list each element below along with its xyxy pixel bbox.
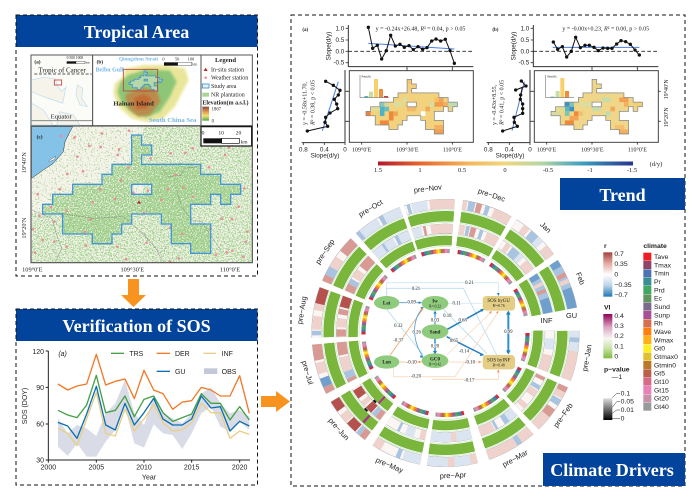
month labels: pre−Aug bbox=[295, 296, 308, 325]
map a: location in Asia: km bbox=[86, 61, 90, 65]
month labels: pre−Jul bbox=[300, 360, 315, 386]
heading: Tropical Area bbox=[16, 15, 258, 47]
month labels: pre−Dec bbox=[477, 186, 507, 204]
top scatter a: 0.5 bbox=[336, 37, 345, 44]
left scatter b: y = -0.43x+8.55, bbox=[492, 84, 498, 125]
map b: Hainan Island: Qiongzhou Strait bbox=[119, 56, 158, 62]
legend: climate: Gt0 bbox=[654, 346, 665, 353]
legend: climate: Gtmax0 bbox=[654, 354, 678, 361]
edge coefficients: 0.20 bbox=[431, 344, 440, 349]
top scatter b: 1.0 bbox=[521, 25, 530, 32]
legend: r: 0 bbox=[614, 271, 618, 278]
legend: p-value: —1 bbox=[612, 374, 622, 381]
map a: location in Asia: Tropic of Cancer bbox=[38, 67, 86, 75]
legend: r: r bbox=[604, 243, 607, 250]
arrow: verification to drivers bbox=[261, 391, 290, 412]
heading: Climate Drivers bbox=[543, 453, 685, 486]
trend charts b bbox=[484, 25, 670, 160]
inset histogram b bbox=[546, 75, 574, 98]
legend: climate: Gt15 bbox=[654, 387, 669, 394]
sector: Feb bbox=[267, 155, 624, 502]
left scatter a: 0 bbox=[343, 146, 347, 153]
map axis labels: 19°20′N bbox=[21, 217, 28, 239]
map b: Hainan Island: Hainan Island bbox=[113, 100, 154, 107]
month labels: pre−Nov bbox=[413, 182, 443, 195]
inset map group bbox=[31, 55, 252, 126]
chart legend: INF bbox=[222, 351, 233, 358]
sector: pre-Mar bbox=[264, 151, 627, 502]
map b: Hainan Island: Beibu Gulf bbox=[96, 68, 125, 74]
top scatter a: -0.5 bbox=[333, 60, 345, 67]
trend charts b: (b) bbox=[492, 28, 499, 33]
edge coefficients bbox=[393, 281, 513, 383]
inset histogram a bbox=[360, 75, 389, 98]
top scatter b: -0.5 bbox=[518, 60, 530, 67]
heat map b: 19°20′N bbox=[663, 107, 670, 127]
heat map b: 109°0′E bbox=[537, 146, 557, 153]
heat map a: 109°0′E bbox=[352, 146, 372, 153]
legend: climate: Pr bbox=[654, 279, 662, 286]
legend: VI: 0 bbox=[614, 354, 618, 361]
edge coefficients: 0.03 bbox=[431, 318, 440, 323]
legend: p-value: 0.1 bbox=[621, 390, 630, 397]
heat map a bbox=[347, 68, 473, 153]
month labels: GU bbox=[566, 311, 577, 320]
map axis labels: 110°0′E bbox=[220, 266, 240, 273]
line chart: SOS by year: 30 bbox=[36, 458, 44, 465]
colour bar: slope d/y: (d/y) bbox=[650, 161, 662, 168]
left scatter a: Slope(d/y) bbox=[311, 153, 339, 160]
month labels: INF bbox=[541, 316, 553, 325]
map a: location in Asia: 0 500 1000 bbox=[67, 56, 83, 60]
legend: climate: Tmin bbox=[654, 271, 669, 278]
weather stations bbox=[31, 129, 249, 263]
legend: r: −0.35 bbox=[614, 282, 632, 289]
edge coefficients: 0.11 bbox=[453, 302, 461, 307]
line chart: SOS by year: 2000 bbox=[41, 464, 56, 471]
chart legend: TRS bbox=[129, 351, 144, 358]
node: SOS by INF: SOS byINF bbox=[487, 358, 511, 363]
map legend: 0 bbox=[212, 120, 215, 125]
map b: Hainan Island bbox=[93, 55, 201, 126]
legend: climate: Rh bbox=[654, 321, 663, 328]
chart legend: GU bbox=[175, 369, 185, 376]
map scale bar: 0 bbox=[202, 130, 205, 136]
panel: verification of SOS bbox=[16, 309, 258, 485]
trend charts a bbox=[299, 25, 473, 160]
left scatter b bbox=[484, 70, 532, 160]
legend: VI: 0.4 bbox=[614, 313, 624, 320]
node: Lon: Lon bbox=[382, 361, 391, 366]
sector: pre-Jan bbox=[314, 202, 577, 464]
top scatter b: y = -0.00x+0.23, R² = 0.00, p > 0.05 bbox=[562, 27, 649, 33]
legend: p-value: 0.05 bbox=[621, 399, 634, 406]
map b: Hainan Island: (b) bbox=[97, 58, 103, 65]
legend: climate: Prd bbox=[654, 287, 665, 294]
panel: trend and climate drivers bbox=[263, 15, 685, 502]
line chart: SOS by year: 2010 bbox=[136, 464, 152, 471]
top scatter b: 0.0 bbox=[521, 48, 530, 55]
month labels: Jan bbox=[538, 220, 553, 235]
node: Iw bbox=[422, 296, 448, 311]
colour bar: slope d/y: 0.5 bbox=[458, 167, 466, 174]
legend: climate: Tmax bbox=[654, 262, 672, 269]
diagram edges bbox=[387, 283, 508, 379]
colour bar: slope d/y: -1 bbox=[587, 167, 593, 174]
line chart: SOS by year: 60 bbox=[36, 422, 44, 429]
month labels: pre−Oct bbox=[357, 198, 384, 219]
edge coefficients: 0.09 bbox=[407, 301, 416, 306]
map legend: In-situ station bbox=[211, 67, 244, 73]
node: Lat bbox=[374, 296, 399, 309]
map axis labels: 19°40′N bbox=[21, 152, 28, 173]
node: SOS by INF: R²=0.48 bbox=[493, 363, 505, 367]
legend: climate: Gtmin0 bbox=[654, 362, 676, 369]
edge coefficients: -0.17 bbox=[464, 378, 475, 383]
map legend bbox=[201, 55, 252, 126]
heat map b: 110°0′E bbox=[628, 146, 647, 153]
node: Lon bbox=[374, 355, 399, 369]
legend: p-value bbox=[603, 366, 634, 422]
node: Iw: R²=0.22 bbox=[429, 304, 441, 308]
study area outline bbox=[43, 135, 241, 253]
line chart: SOS by year: 2005 bbox=[89, 464, 104, 471]
legend: climate: Gt10 bbox=[654, 379, 669, 386]
sector: pre-Dec bbox=[301, 188, 590, 478]
edge coefficients: 0.21 bbox=[412, 287, 421, 292]
sector: pre-Apr bbox=[289, 177, 602, 489]
month labels bbox=[295, 182, 594, 480]
map legend: Study area bbox=[211, 84, 237, 90]
top scatter a: 0.0 bbox=[336, 48, 345, 55]
line chart: SOS by year: 2015 bbox=[184, 464, 200, 471]
month labels: pre−Apr bbox=[439, 470, 467, 480]
map a: location in Asia: (a) bbox=[34, 58, 41, 65]
left scatter a: y = -0.58x+11.70, bbox=[303, 82, 309, 125]
left scatter a: R² = 0.38, p < 0.05 bbox=[310, 80, 316, 126]
left scatter b: 0.8 bbox=[484, 146, 493, 153]
map legend: 1867 bbox=[212, 107, 222, 112]
legend: climate: Gt5 bbox=[654, 371, 665, 378]
heat map a: 109°30′E bbox=[396, 146, 419, 153]
legend: VI: VI bbox=[604, 304, 611, 311]
node: GC0: GC0 bbox=[430, 357, 440, 362]
map a: location in Asia bbox=[31, 55, 93, 126]
sector: pre-Feb bbox=[275, 163, 616, 502]
top scatter b bbox=[510, 25, 658, 69]
heading: Climate Drivers: Climate Drivers bbox=[550, 460, 674, 480]
arrow heads bbox=[419, 293, 511, 372]
node: SOS by INF bbox=[483, 355, 515, 369]
heat map b bbox=[532, 68, 670, 153]
edge coefficients: 0.18 bbox=[443, 314, 452, 319]
top scatter a: 1.0 bbox=[336, 25, 345, 32]
sector: pre-Nov bbox=[283, 170, 608, 496]
node: GC0 bbox=[422, 353, 448, 368]
map legend: Legend bbox=[215, 57, 236, 64]
node: SOS by GU bbox=[483, 296, 515, 311]
line chart: SOS by year bbox=[22, 349, 250, 481]
map c: study area with rubber plantations bbox=[21, 126, 252, 273]
node: GC0: R²=0.42 bbox=[429, 362, 441, 366]
in-situ station marker bbox=[137, 200, 141, 204]
edge coefficients: -0.14 bbox=[459, 349, 470, 354]
map axis labels bbox=[21, 152, 240, 273]
heat map a: Ratio(%) bbox=[362, 76, 371, 79]
node: Sand: Sand bbox=[430, 330, 441, 335]
legend: climate: Wmax bbox=[654, 337, 674, 344]
map b: Hainan Island: 50 bbox=[175, 56, 179, 61]
OBS band bbox=[58, 380, 249, 457]
colour bar: slope d/y bbox=[374, 161, 662, 174]
edge coefficients: 0.68 bbox=[458, 318, 467, 323]
legend: r bbox=[603, 243, 632, 299]
map b: Hainan Island: South China Sea bbox=[149, 117, 197, 124]
line chart: SOS by year: 120 bbox=[32, 349, 44, 356]
sector: pre-Oct bbox=[263, 151, 628, 502]
heading: Tropical Area: Tropical Area bbox=[84, 22, 189, 42]
top scatter b: 0.5 bbox=[521, 37, 530, 44]
left scatter b: 0.4 bbox=[505, 146, 514, 153]
map legend: NR plantation bbox=[211, 93, 245, 99]
map a: location in Asia: Equator bbox=[51, 114, 73, 121]
edge coefficients: -0.10 bbox=[407, 361, 417, 366]
month labels: pre−Jan bbox=[580, 344, 594, 372]
top scatter a: Slope(d/y) bbox=[325, 32, 332, 60]
legend: VI: 0.2 bbox=[614, 333, 624, 340]
map c: study area with rubber plantations: (c) bbox=[37, 134, 43, 141]
line chart: SOS by year: 90 bbox=[36, 385, 44, 392]
legend: r: −0.7 bbox=[614, 292, 628, 299]
series lines bbox=[58, 354, 249, 446]
month labels: pre−Mar bbox=[501, 448, 530, 469]
sector: pre-Jun bbox=[265, 152, 626, 502]
month labels: pre−Feb bbox=[551, 401, 575, 429]
legend: climate: Wave bbox=[654, 329, 671, 336]
line chart: SOS by year: 2020 bbox=[232, 464, 248, 471]
sector: pre-May bbox=[294, 182, 597, 484]
chart legend bbox=[111, 351, 237, 376]
top scatter a bbox=[325, 25, 473, 69]
legend: r: 0.7 bbox=[614, 251, 624, 258]
heat map b: Ratio(%) bbox=[547, 76, 557, 79]
edge coefficients: -0.20 bbox=[411, 374, 422, 379]
sector: Jan bbox=[268, 155, 623, 502]
edge coefficients: 0.21 bbox=[465, 281, 474, 286]
node: Iw: Iw bbox=[432, 299, 438, 304]
legend: p-value: 0.01 bbox=[621, 407, 634, 414]
legend: climate bbox=[643, 243, 678, 411]
map axis labels: 109°0′E bbox=[22, 266, 43, 273]
left scatter b: R² = 0.41, p < 0.05 bbox=[500, 80, 506, 126]
left scatter a: 0.8 bbox=[299, 146, 308, 153]
heading: Trend bbox=[560, 178, 685, 210]
chart legends bbox=[603, 243, 678, 422]
trend charts a: (a) bbox=[302, 28, 308, 33]
path diagram bbox=[374, 281, 515, 383]
node: SOS by GU: SOS byGU bbox=[487, 299, 510, 304]
colour bar: slope d/y: -1.5 bbox=[627, 167, 637, 174]
map b: Hainan Island: 100 bbox=[188, 56, 194, 61]
chart legend: DER bbox=[175, 351, 190, 358]
legend: climate: Sunp bbox=[654, 312, 670, 319]
edge coefficients: 0.26 bbox=[412, 331, 421, 336]
sector: pre-Aug bbox=[312, 200, 579, 466]
heat map a: 110°0′E bbox=[443, 146, 462, 153]
map scale bar: km bbox=[241, 139, 248, 145]
map scale bar: 20 bbox=[236, 130, 241, 136]
map legend: Elevation(m a.s.l.) bbox=[202, 99, 249, 106]
month labels: Feb bbox=[574, 271, 587, 286]
legend: climate: Gt20 bbox=[654, 396, 669, 403]
arrow: area to verification bbox=[121, 279, 146, 307]
map scale bar: 10 bbox=[218, 130, 224, 136]
top scatter a: y = -0.24x+26.48, R² = 0.04, p > 0.05 bbox=[376, 27, 465, 33]
map legend: Weather station bbox=[211, 76, 248, 82]
node: SOS by GU: R²=0.76 bbox=[493, 304, 505, 308]
left scatter b: Slope(d/y) bbox=[496, 153, 524, 160]
legend: VI bbox=[603, 304, 624, 361]
edge coefficients: 0.32 bbox=[394, 324, 403, 329]
map b: Hainan Island: km bbox=[192, 62, 197, 66]
sector: pre-Sep bbox=[276, 164, 615, 502]
heat map b: 19°40′N bbox=[663, 79, 670, 99]
axes bbox=[46, 351, 250, 463]
chart legend: OBS bbox=[222, 369, 237, 376]
map axis labels: 109°30′E bbox=[121, 266, 144, 273]
edge coefficients: 0.65 bbox=[450, 339, 459, 344]
colour bar: slope d/y: -0.5 bbox=[543, 167, 553, 174]
edge coefficients: -0.37 bbox=[393, 338, 404, 343]
legend: climate: Ec bbox=[654, 296, 663, 303]
legend: climate: Gt40 bbox=[654, 404, 669, 411]
left scatter b: 0 bbox=[528, 146, 532, 153]
legend: VI: 0.3 bbox=[614, 323, 624, 330]
legend: p-value: p−value bbox=[604, 366, 630, 373]
edge coefficients: 0.99 bbox=[504, 330, 513, 335]
map b: Hainan Island: 0 bbox=[162, 56, 165, 61]
legend: climate: Tave bbox=[654, 254, 669, 261]
panel: tropical area bbox=[16, 15, 258, 276]
colour bar: slope d/y: 1.5 bbox=[374, 167, 382, 174]
legend: climate: Sund bbox=[654, 304, 670, 311]
left scatter a bbox=[299, 70, 347, 160]
circular heat chart bbox=[263, 151, 628, 502]
month labels: pre−Jun bbox=[327, 416, 351, 442]
heading: Verification of SOS: Verification of SOS bbox=[62, 316, 211, 336]
month labels: pre−May bbox=[374, 455, 405, 475]
top scatter b: Slope(d/y) bbox=[510, 32, 517, 60]
legend: p-value: 0 bbox=[621, 415, 625, 422]
sector: pre-Jul bbox=[272, 159, 619, 502]
legend: r: 0.35 bbox=[614, 261, 628, 268]
colour bar: slope d/y: 1 bbox=[418, 167, 422, 174]
edge coefficients: -0.10 bbox=[465, 361, 476, 366]
heading: Verification of SOS bbox=[16, 309, 258, 341]
heading: Trend: Trend bbox=[599, 185, 646, 205]
colour bar: slope d/y: 0 bbox=[503, 167, 507, 174]
line chart: SOS by year: Year bbox=[142, 474, 157, 481]
map scale bar bbox=[201, 127, 252, 146]
line chart: SOS by year: SOS (DOY) bbox=[22, 388, 29, 424]
legend: VI: 0.1 bbox=[614, 344, 624, 351]
heat map b: 109°30′E bbox=[581, 146, 604, 153]
legend: climate: climate bbox=[643, 243, 667, 250]
left scatter a: 0.4 bbox=[320, 146, 329, 153]
node: Lat: Lat bbox=[383, 301, 391, 306]
node: Sand bbox=[422, 324, 448, 339]
line chart: SOS by year: (a) bbox=[58, 351, 67, 358]
month labels: pre−Sep bbox=[313, 237, 336, 266]
